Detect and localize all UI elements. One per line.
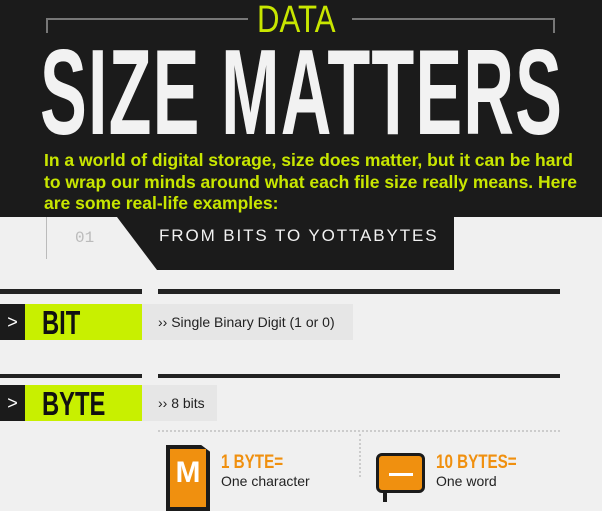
text: 10 bytes bbox=[436, 452, 517, 489]
section tab bbox=[46, 217, 454, 270]
bracket line bbox=[46, 18, 248, 33]
text: 10 bytes: One word bbox=[436, 473, 497, 489]
intro text: In a world of digital storage, size does matter, but it can be hard to wrap our minds around what each file size really means. Here are some real-life examples: bbox=[44, 150, 577, 213]
divider lines bbox=[0, 289, 142, 294]
text: 1 byte bbox=[221, 452, 310, 489]
title: SIZE MATTERS bbox=[40, 24, 563, 160]
section number bbox=[46, 217, 47, 259]
header panel bbox=[0, 0, 602, 217]
section tab: 01 bbox=[75, 229, 94, 247]
row: BIT: ›› Single Binary Digit (1 or 0) bbox=[158, 314, 335, 330]
text: 1 byte: 1 BYTE= bbox=[221, 452, 283, 473]
row: BYTE: > bbox=[7, 393, 18, 413]
subtitle: DATA: DATA bbox=[257, 0, 335, 41]
row: BYTE bbox=[0, 385, 217, 422]
section tab: FROM BITS TO YOTTABYTES bbox=[159, 226, 439, 245]
row: BYTE: BYTE bbox=[42, 385, 105, 422]
row: BIT bbox=[0, 304, 353, 341]
icon: M letter card bbox=[166, 445, 210, 511]
icon: speech bubble bbox=[376, 453, 425, 502]
text: 1 byte: One character bbox=[221, 473, 310, 489]
text: 10 bytes: 10 BYTES= bbox=[436, 452, 517, 473]
row: BIT: BIT bbox=[42, 304, 80, 341]
row: BIT: > bbox=[7, 312, 18, 332]
icon: M letter card: M bbox=[176, 456, 200, 489]
section heading bbox=[117, 217, 454, 270]
row: BYTE: ›› 8 bits bbox=[158, 395, 205, 411]
